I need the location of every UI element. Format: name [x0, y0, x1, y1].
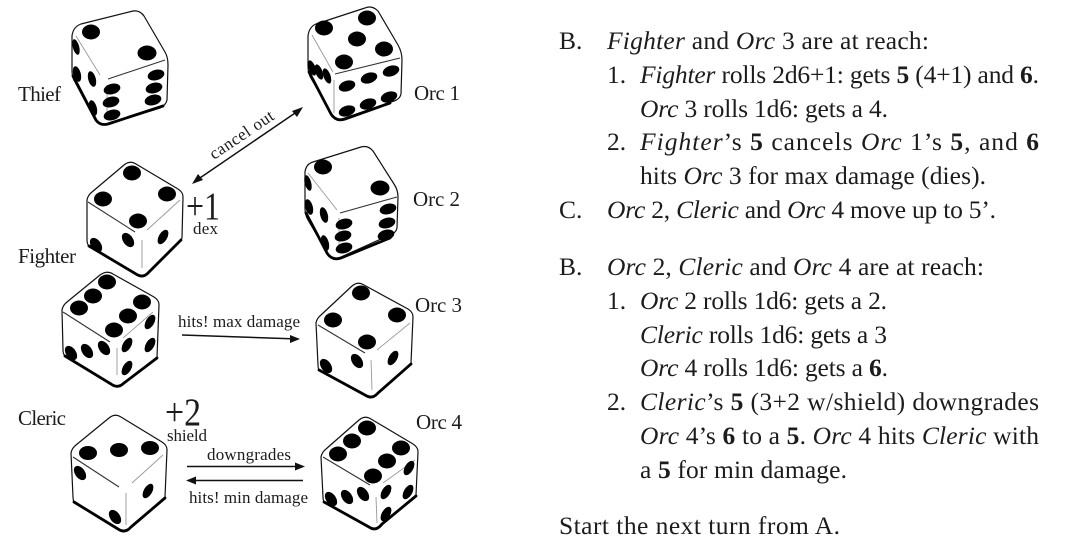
die: Cleric rolling 3 — [71, 415, 167, 531]
label: Orc 2: Orc 2 — [413, 187, 460, 211]
label: hits! max damage: hits! max damage — [178, 312, 300, 331]
modifier: +2 shield: shield — [167, 426, 208, 445]
text: closing line: Start the next turn from A. — [559, 511, 840, 540]
text block: first round steps: Fighter and Orc 3 are at reach: — [606, 26, 929, 55]
arrow: hits max damage — [182, 335, 300, 343]
text block: second round steps — [559, 252, 1039, 484]
text block: second round steps: Orc 4 rolls 1d6: gets a 6. — [640, 353, 888, 382]
arrow: downgrades — [187, 462, 305, 470]
modifier: +2 shield: +2 — [165, 391, 201, 434]
label: Orc 4: Orc 4 — [416, 410, 462, 434]
die: Fighter rolling 6 — [62, 272, 159, 386]
panel: dice diagram — [18, 7, 462, 531]
label: Fighter: Fighter — [18, 244, 76, 268]
label: Orc 3: Orc 3 — [415, 293, 462, 317]
label: hits! min damage: hits! min damage — [189, 488, 308, 507]
label: cancel out: cancel out — [206, 106, 278, 163]
die: Orc 4 rolling 6 — [321, 417, 418, 529]
text block: second round steps: Cleric rolls 1d6: gets a 3 — [640, 320, 887, 349]
text block: second round steps: Orc 2, Cleric and Orc 4 are at reach: — [607, 252, 984, 281]
text block: second round steps: Orc 2 rolls 1d6: gets a 2. — [640, 286, 887, 315]
text block: first round steps: 2. — [607, 127, 626, 156]
arrow: hits min damage — [186, 476, 303, 484]
text block: second round steps: Cleric’s 5 (3+2 w/shield) downgrades — [640, 387, 1039, 416]
label: Orc 1: Orc 1 — [414, 81, 460, 105]
text block: second round steps: 2. — [607, 387, 626, 416]
text block: first round steps — [559, 26, 1039, 224]
text block: first round steps: Fighter’s 5 cancels Orc 1’s 5, and 6 — [639, 127, 1039, 156]
die: Thief rolling 2 — [71, 11, 168, 125]
arrow: cancel out — [192, 107, 303, 184]
modifier: +1 dex: +1 — [186, 185, 220, 228]
text block: second round steps: B. — [559, 252, 582, 281]
text block: first round steps: hits Orc 3 for max damage (dies). — [640, 161, 986, 190]
text block: second round steps: a 5 for min damage. — [640, 455, 847, 484]
die: Orc 2 rolling 2 — [303, 146, 398, 259]
modifier: +1 dex: dex — [193, 219, 218, 238]
label: Thief: Thief — [18, 82, 61, 106]
text block: first round steps: Orc 2, Cleric and Orc 4 move up to 5’. — [607, 195, 996, 224]
label: downgrades: downgrades — [207, 445, 291, 464]
die: Fighter rolling 4 — [87, 162, 183, 276]
text block: first round steps: Fighter rolls 2d6+1: gets 5 (4+1) and 6. — [639, 60, 1039, 89]
text block: first round steps: 1. — [607, 60, 626, 89]
die: Orc 1 rolling 5 — [306, 7, 402, 120]
text block: first round steps: B. — [559, 26, 582, 55]
text block: second round steps: Orc 4’s 6 to a 5. Orc 4 hits Cleric with — [640, 421, 1039, 450]
text block: second round steps: 1. — [607, 286, 626, 315]
die: Orc 3 rolling 4 — [316, 283, 413, 397]
label: Cleric: Cleric — [18, 406, 66, 430]
modifier: +1 dex — [186, 185, 220, 238]
text block: first round steps: C. — [559, 195, 582, 224]
text block: first round steps: Orc 3 rolls 1d6: gets a 4. — [640, 94, 888, 123]
